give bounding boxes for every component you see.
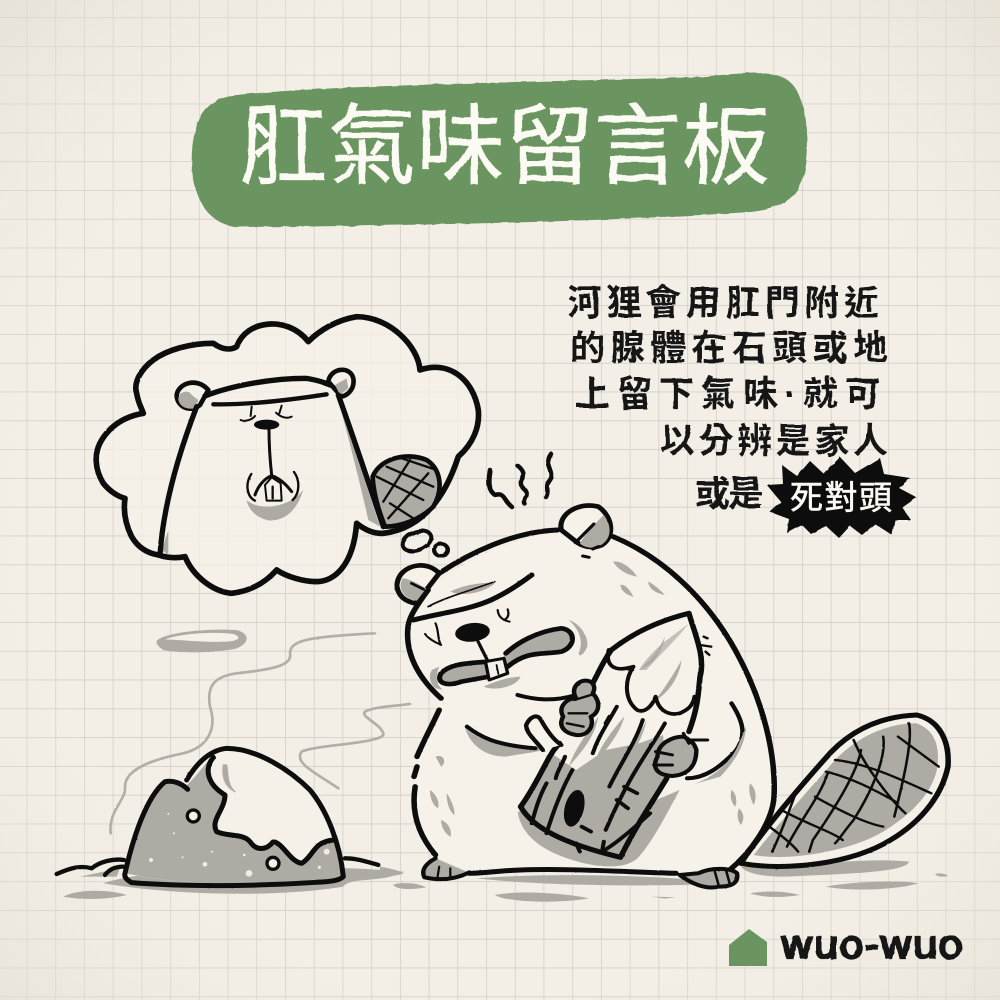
body outline bbox=[408, 530, 774, 873]
beaver body shading in bubble bbox=[162, 407, 380, 555]
leaf-shaped cut edge bbox=[608, 650, 694, 714]
rock scene bbox=[57, 630, 410, 899]
brand name: wuo-wuo bbox=[780, 923, 963, 967]
ground shadows bbox=[63, 867, 410, 899]
callout: black burst with 死對頭 bbox=[767, 457, 916, 538]
text line 4: 以分辨是家人 bbox=[660, 422, 888, 461]
text line 5: 或是 bbox=[695, 475, 763, 514]
nose bbox=[454, 621, 491, 644]
right ear bbox=[561, 505, 611, 557]
log bbox=[521, 613, 711, 857]
thought bubble bbox=[96, 317, 479, 593]
branch bbox=[526, 716, 561, 750]
forehead and shading bbox=[430, 562, 756, 837]
beaver ears in bubble bbox=[177, 370, 354, 409]
right arm bbox=[687, 703, 742, 778]
smell wisp 1 bbox=[110, 633, 375, 833]
halo ring bbox=[157, 630, 247, 652]
rock speckles bbox=[149, 813, 330, 877]
logo bbox=[729, 923, 963, 967]
mouth bbox=[440, 628, 572, 684]
knot hole bbox=[561, 788, 588, 828]
icon: green house bbox=[729, 929, 767, 966]
philtrum bbox=[478, 642, 487, 660]
beaver tail in bubble bbox=[373, 456, 440, 527]
ground shadows under beaver bbox=[380, 860, 948, 902]
rock gray area bbox=[126, 757, 343, 884]
smell wisp 2 bbox=[300, 704, 410, 788]
heat lines above the beaver bbox=[489, 454, 552, 507]
eyes bbox=[425, 609, 510, 645]
cloud outline bbox=[96, 317, 479, 593]
body fill bbox=[408, 530, 774, 873]
wood grain bbox=[532, 707, 665, 852]
tooth bbox=[485, 658, 508, 680]
text line 3: 上留下氣味·就可 bbox=[575, 375, 880, 414]
right foot bbox=[680, 869, 737, 887]
log shadow bbox=[518, 790, 680, 866]
log gray wood bbox=[522, 735, 667, 856]
lower hand bbox=[655, 737, 696, 776]
explanatory text block bbox=[567, 284, 888, 514]
callout: black burst with 死對頭: 死對頭 bbox=[790, 479, 892, 516]
rock outline bbox=[125, 748, 343, 886]
left ear bbox=[397, 565, 439, 603]
tip highlight bbox=[639, 623, 689, 670]
beaver outline in bubble bbox=[160, 378, 383, 555]
title banner bbox=[192, 73, 807, 227]
brow strokes bbox=[428, 582, 495, 607]
banner: green brush shape bbox=[192, 73, 807, 227]
left foot bbox=[423, 858, 469, 879]
tail crosshatch bbox=[765, 723, 939, 852]
upper hand bbox=[561, 681, 598, 735]
text line 2: 的腺體在石頭或地 bbox=[570, 329, 888, 368]
text line 1: 河狸會用肛門附近 bbox=[567, 284, 879, 323]
beaver with log bbox=[380, 505, 948, 902]
ground line left bbox=[57, 858, 378, 875]
heading: 肛氣味留言板 bbox=[240, 97, 770, 196]
brow line bbox=[413, 575, 532, 620]
beaver face in bubble bbox=[213, 394, 327, 501]
small thought bubbles bbox=[400, 527, 448, 556]
log outline bbox=[521, 613, 702, 857]
tail bbox=[741, 715, 948, 866]
rock holes bbox=[187, 810, 279, 869]
rock body bbox=[125, 748, 343, 884]
left arm shading and line bbox=[465, 728, 543, 757]
